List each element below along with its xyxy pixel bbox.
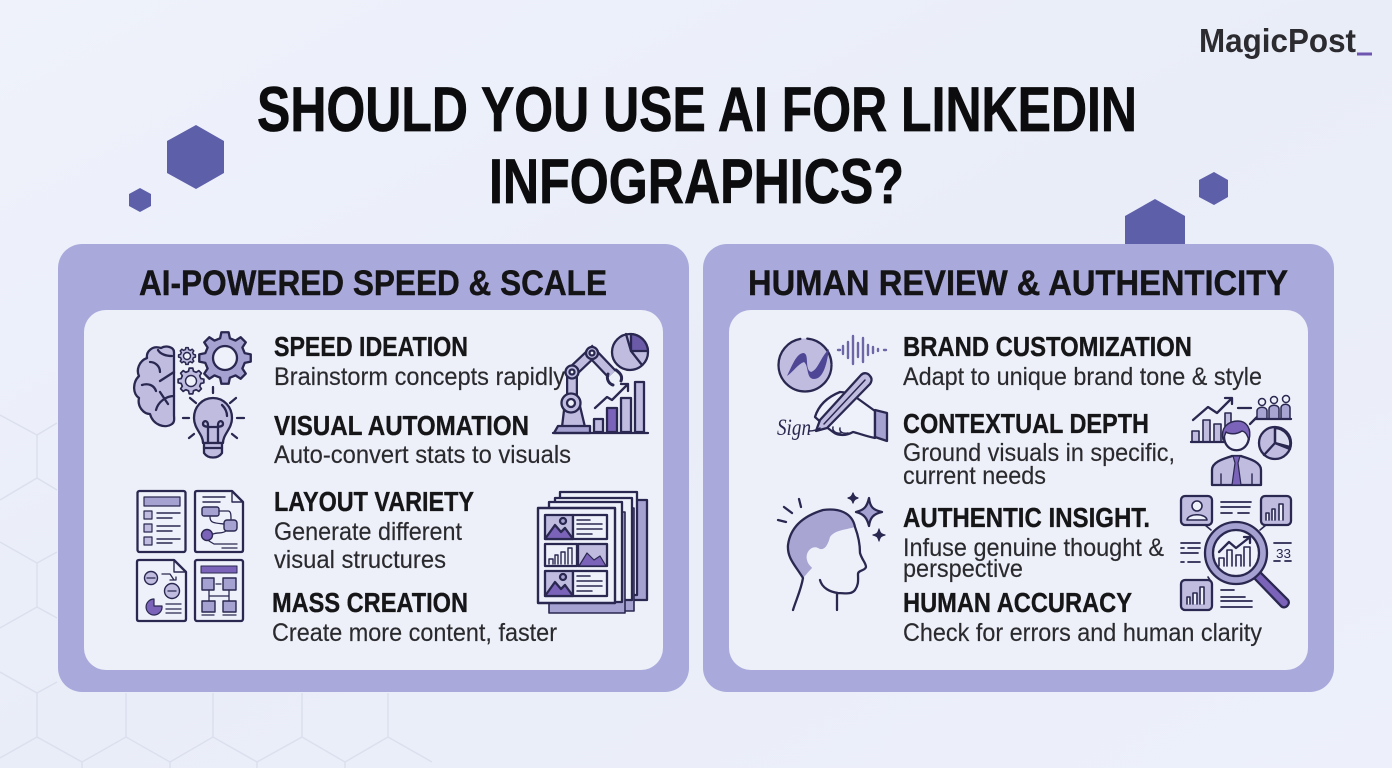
title: SHOULD YOU USE AI FOR LINKEDIN bbox=[257, 75, 1137, 145]
text: mass creation bbox=[272, 587, 557, 647]
icon: robot arm with pie and bar chart bbox=[553, 334, 648, 433]
text: brand customization: BRAND CUSTOMIZATION bbox=[903, 331, 1192, 362]
title: INFOGRAPHICS? bbox=[489, 147, 904, 217]
text: human accuracy: Check for errors and human clarity bbox=[903, 619, 1262, 647]
text: brand customization: Adapt to unique brand tone & style bbox=[903, 363, 1262, 391]
text: contextual depth bbox=[903, 408, 1175, 490]
decorative hexagon right behind panel bbox=[1125, 199, 1185, 250]
inner card left bbox=[84, 310, 663, 670]
text: authentic insight: AUTHENTIC INSIGHT. bbox=[903, 502, 1150, 533]
panel heading: AI-powered: AI-POWERED SPEED & SCALE bbox=[139, 264, 607, 303]
text: brand customization bbox=[903, 331, 1262, 391]
icon: stacked layout pages bbox=[538, 492, 647, 613]
decorative hexagon large left bbox=[167, 125, 224, 189]
text: authentic insight: Infuse genuine thought & bbox=[903, 534, 1164, 562]
text: contextual depth: CONTEXTUAL DEPTH bbox=[903, 408, 1149, 439]
text: visual automation: VISUAL AUTOMATION bbox=[274, 410, 529, 441]
text: human accuracy bbox=[903, 587, 1262, 647]
card: profile bbox=[1181, 496, 1212, 530]
document: list layout bbox=[138, 491, 186, 552]
logo: MagicPost: MagicPost bbox=[1199, 22, 1356, 59]
text: speed ideation: SPEED IDEATION bbox=[274, 331, 468, 362]
text: contextual depth: Ground visuals in specific, bbox=[903, 439, 1175, 467]
icon: magnifying glass with data cards bbox=[1181, 496, 1291, 610]
text: visual automation: Auto-convert stats to visuals bbox=[274, 441, 571, 469]
text: human accuracy: HUMAN ACCURACY bbox=[903, 587, 1132, 618]
text: layout variety: visual structures bbox=[274, 546, 446, 574]
card: top right chart bbox=[1260, 496, 1291, 530]
decorative hexagon small right bbox=[1199, 172, 1228, 205]
text: authentic insight: perspective bbox=[903, 555, 1023, 583]
panel: human review and authenticity bbox=[703, 244, 1334, 692]
document: org chart layout bbox=[195, 560, 243, 621]
text: contextual depth: current needs bbox=[903, 462, 1046, 490]
title bbox=[257, 75, 1137, 217]
text: speed ideation: Brainstorm concepts rapidly bbox=[274, 363, 565, 391]
panel: AI-powered speed and scale bbox=[58, 244, 689, 692]
document: pie layout bbox=[137, 560, 186, 621]
text: layout variety: Generate different bbox=[274, 518, 462, 546]
icon: magnifying glass with data cards: 33 bbox=[1276, 546, 1291, 561]
document: flow layout bbox=[195, 491, 243, 552]
icon: person with charts bbox=[1191, 396, 1291, 485]
card: bottom left chart bbox=[1181, 577, 1212, 610]
signature text: Sign bbox=[777, 415, 811, 440]
text: mass creation: MASS CREATION bbox=[272, 587, 468, 618]
icon: head with sparkles bbox=[778, 493, 885, 610]
text: authentic insight bbox=[903, 502, 1164, 583]
icon: brand logo, soundwave, signing hand bbox=[777, 336, 887, 441]
text: mass creation: Create more content, faster bbox=[272, 619, 557, 647]
text: layout variety bbox=[274, 486, 474, 574]
inner card right bbox=[729, 310, 1308, 670]
icon: layout documents bbox=[137, 491, 243, 621]
text: visual automation bbox=[274, 410, 571, 469]
decorative hexagon small left bbox=[129, 188, 151, 212]
text: speed ideation bbox=[274, 331, 565, 391]
text: layout variety: LAYOUT VARIETY bbox=[274, 486, 474, 517]
icon: brain, gears and light bulb bbox=[134, 332, 251, 458]
panel heading: human review: HUMAN REVIEW & AUTHENTICITY bbox=[748, 264, 1288, 303]
